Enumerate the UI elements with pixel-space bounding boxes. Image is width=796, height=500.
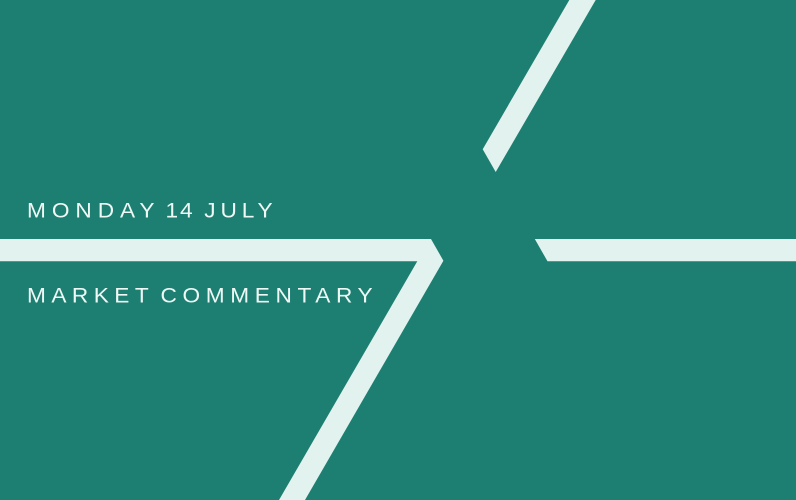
chevron shape: left bar and diagonal xyxy=(0,239,443,500)
bar shape: right xyxy=(535,239,796,261)
date heading xyxy=(27,198,277,222)
diagonal shape: top right xyxy=(483,0,596,172)
title: market commentary: MARKET xyxy=(27,283,154,307)
date heading: JULY xyxy=(204,198,277,222)
title: market commentary: COMMENTARY xyxy=(160,283,378,307)
date heading: MONDAY xyxy=(27,198,160,222)
title: market commentary xyxy=(27,283,378,307)
date heading: 14 xyxy=(166,198,195,222)
